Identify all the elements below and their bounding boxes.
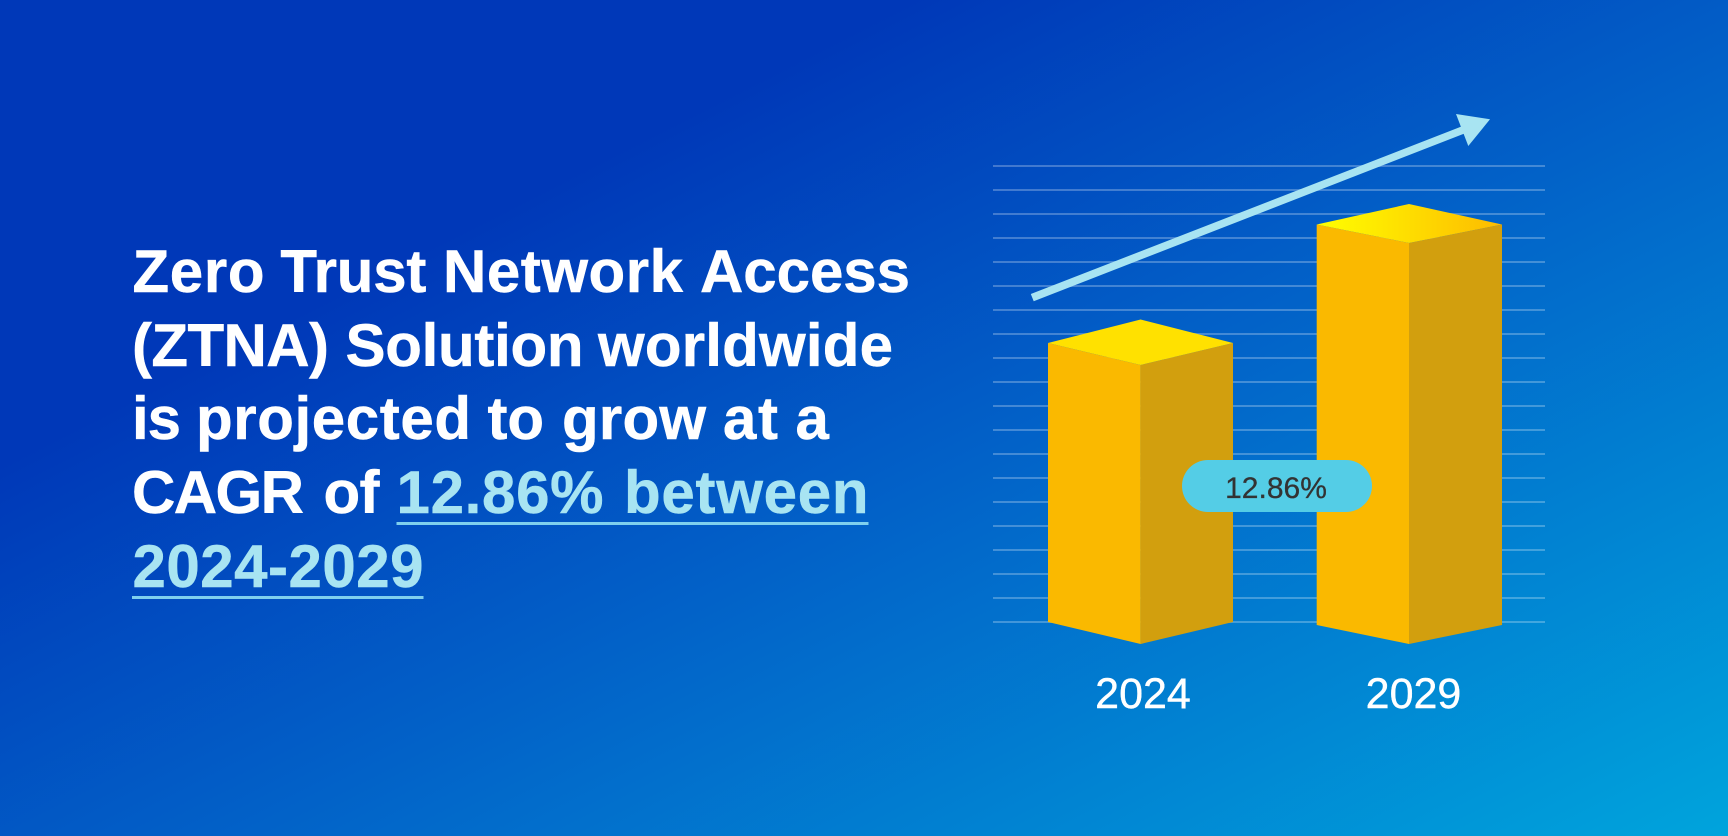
headline text block: grow <box>562 385 706 452</box>
headline text block: at <box>723 385 778 452</box>
headline text block: is <box>132 385 181 452</box>
headline text block: Solution <box>346 312 584 379</box>
headline text block: to <box>488 385 544 452</box>
arrow: growth trend <box>1031 114 1490 301</box>
headline text block: worldwide <box>597 312 893 379</box>
callout: CAGR pill: 12.86% <box>1225 472 1327 505</box>
headline text block: 12.86% <box>396 459 604 526</box>
bar: 2024 <box>1048 320 1233 644</box>
headline text block: Trust <box>280 238 426 305</box>
headline text block <box>132 238 910 600</box>
bar: 2029 <box>1317 204 1502 644</box>
headline text block: Access <box>700 238 910 305</box>
headline text block: projected <box>196 385 471 452</box>
headline text block: between <box>624 459 868 526</box>
headline text block: Network <box>443 238 684 305</box>
label: 2029: 2029 <box>1366 670 1461 718</box>
headline text block: a <box>796 385 830 452</box>
headline text block: of <box>324 459 381 526</box>
headline text block: CAGR <box>132 459 304 526</box>
label: 2024: 2024 <box>1095 670 1191 718</box>
headline text block: (ZTNA) <box>132 312 329 379</box>
callout: CAGR pill <box>1182 460 1372 512</box>
headline text block: Zero <box>132 238 264 305</box>
headline text block: 2024-2029 <box>132 533 424 600</box>
